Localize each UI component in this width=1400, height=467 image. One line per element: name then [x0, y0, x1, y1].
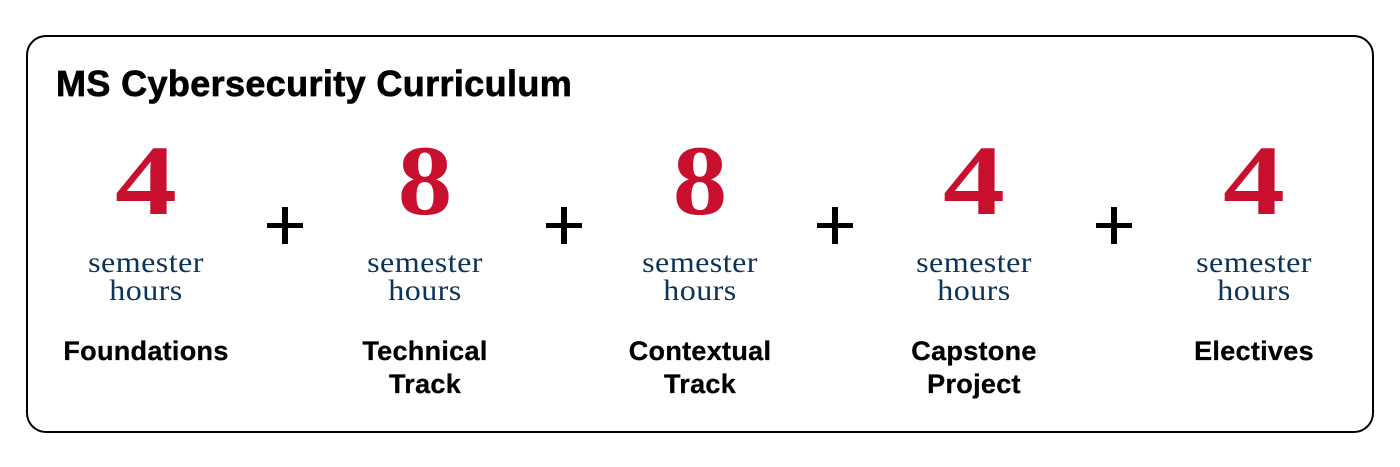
- text: semester: [642, 246, 758, 279]
- column: Foundations: [63, 125, 229, 366]
- column: Capstone Project: [911, 125, 1037, 399]
- title: MS Cybersecurity Curriculum: [56, 63, 572, 104]
- text: Project: [927, 369, 1021, 399]
- plus icon 2: [546, 207, 582, 244]
- column: Technical Track: [362, 125, 488, 399]
- text: hours: [109, 274, 183, 307]
- text: Contextual: [629, 336, 771, 366]
- text: Foundations: [63, 336, 229, 366]
- text: Track: [664, 369, 736, 399]
- text: semester: [367, 246, 483, 279]
- text: 4: [1223, 125, 1285, 236]
- text: 8: [398, 125, 452, 236]
- text: semester: [916, 246, 1032, 279]
- text: Electives: [1194, 336, 1314, 366]
- text: Capstone: [911, 336, 1037, 366]
- column: Contextual Track: [629, 125, 771, 399]
- text: 8: [673, 125, 727, 236]
- text: semester: [1196, 246, 1312, 279]
- text: hours: [388, 274, 462, 307]
- text: hours: [1217, 274, 1291, 307]
- text: Technical: [362, 336, 488, 366]
- column: Electives: [1194, 125, 1314, 366]
- text: 4: [943, 125, 1005, 236]
- text: 4: [115, 125, 177, 236]
- plus icon 3: [817, 207, 853, 244]
- text: hours: [663, 274, 737, 307]
- text: Track: [389, 369, 461, 399]
- plus icon 1: [267, 207, 303, 244]
- plus icon 4: [1096, 207, 1132, 244]
- text: hours: [937, 274, 1011, 307]
- text: semester: [88, 246, 204, 279]
